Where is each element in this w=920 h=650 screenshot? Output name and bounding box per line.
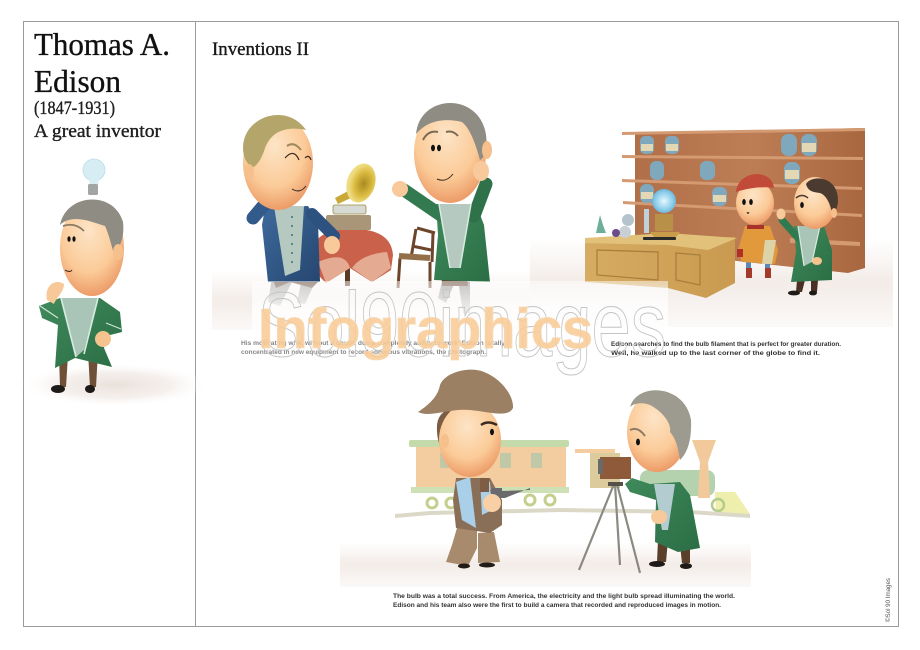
- sidebar floor shadow: [20, 363, 210, 407]
- chair: [398, 228, 435, 288]
- subtitle: life dates: (1847-1931): [34, 98, 115, 119]
- caption: success and camera: The bulb was a total success. From America, the electricity and the light bulb spread illuminating the world.: [393, 593, 735, 600]
- panel: title sidebar: [20, 26, 210, 407]
- train background: [409, 440, 750, 514]
- panel: cinema camera scene: [340, 370, 751, 587]
- floor shadow: [340, 542, 751, 587]
- character: blond man in blue: [243, 115, 340, 306]
- character: Edison dancing: [392, 103, 492, 313]
- caption: phonograph: His motivating wife, without a doubt, due a completely ability to work. Edison totally: [241, 340, 505, 347]
- icon: idea light bulb: [83, 159, 105, 195]
- subtitle: a great inventor: A great inventor: [34, 121, 162, 142]
- shelves: [622, 128, 865, 273]
- character: young Edison in lab: [776, 177, 838, 295]
- title: Thomas A. Edison: Thomas A.: [34, 26, 170, 62]
- watermark: Infographics: Infographics: [258, 297, 593, 361]
- character: Edison filming: [625, 390, 700, 569]
- credit: ©Sol 90 Images: [885, 578, 892, 622]
- desk: [585, 233, 737, 298]
- title: Thomas A. Edison: Edison: [34, 63, 121, 99]
- railway track: [395, 508, 750, 518]
- heading: Inventions II: Inventions II: [212, 40, 309, 60]
- locomotive: [575, 440, 750, 514]
- panel: phonograph scene: [212, 103, 532, 330]
- icon: camera on tripod: [579, 457, 640, 573]
- caption: success and camera: [393, 593, 735, 609]
- train car: [409, 440, 569, 508]
- icon: glowing bulb and glassware: [596, 189, 680, 238]
- floor shadow: [212, 270, 532, 330]
- watermark: Sol90images: Sol90images: [258, 274, 666, 376]
- table with red cloth: [313, 229, 393, 286]
- caption: success and camera: Edison and his team also were the first to build a camera that recorded and reproduced images in motion.: [393, 602, 721, 609]
- watermark: translucent band: [252, 281, 668, 339]
- floor shadow: [530, 238, 893, 327]
- caption: bulb filament: [611, 341, 841, 357]
- panel: light bulb laboratory scene: [530, 128, 893, 327]
- icon: phonograph: [326, 160, 380, 230]
- caption: bulb filament: Well, he walked up to the last corner of the globe to find it.: [611, 350, 820, 357]
- caption: bulb filament: Edison searches to find the bulb filament that is perfect for greater duration.: [611, 341, 841, 348]
- character: thinking Edison: [39, 199, 124, 393]
- character: man in red hat: [736, 174, 778, 278]
- caption: phonograph: concentrated in new equipment to record sonorous vibrations, the photograph.: [241, 349, 486, 356]
- character: cowboy: [418, 370, 530, 568]
- caption: phonograph: [241, 340, 505, 356]
